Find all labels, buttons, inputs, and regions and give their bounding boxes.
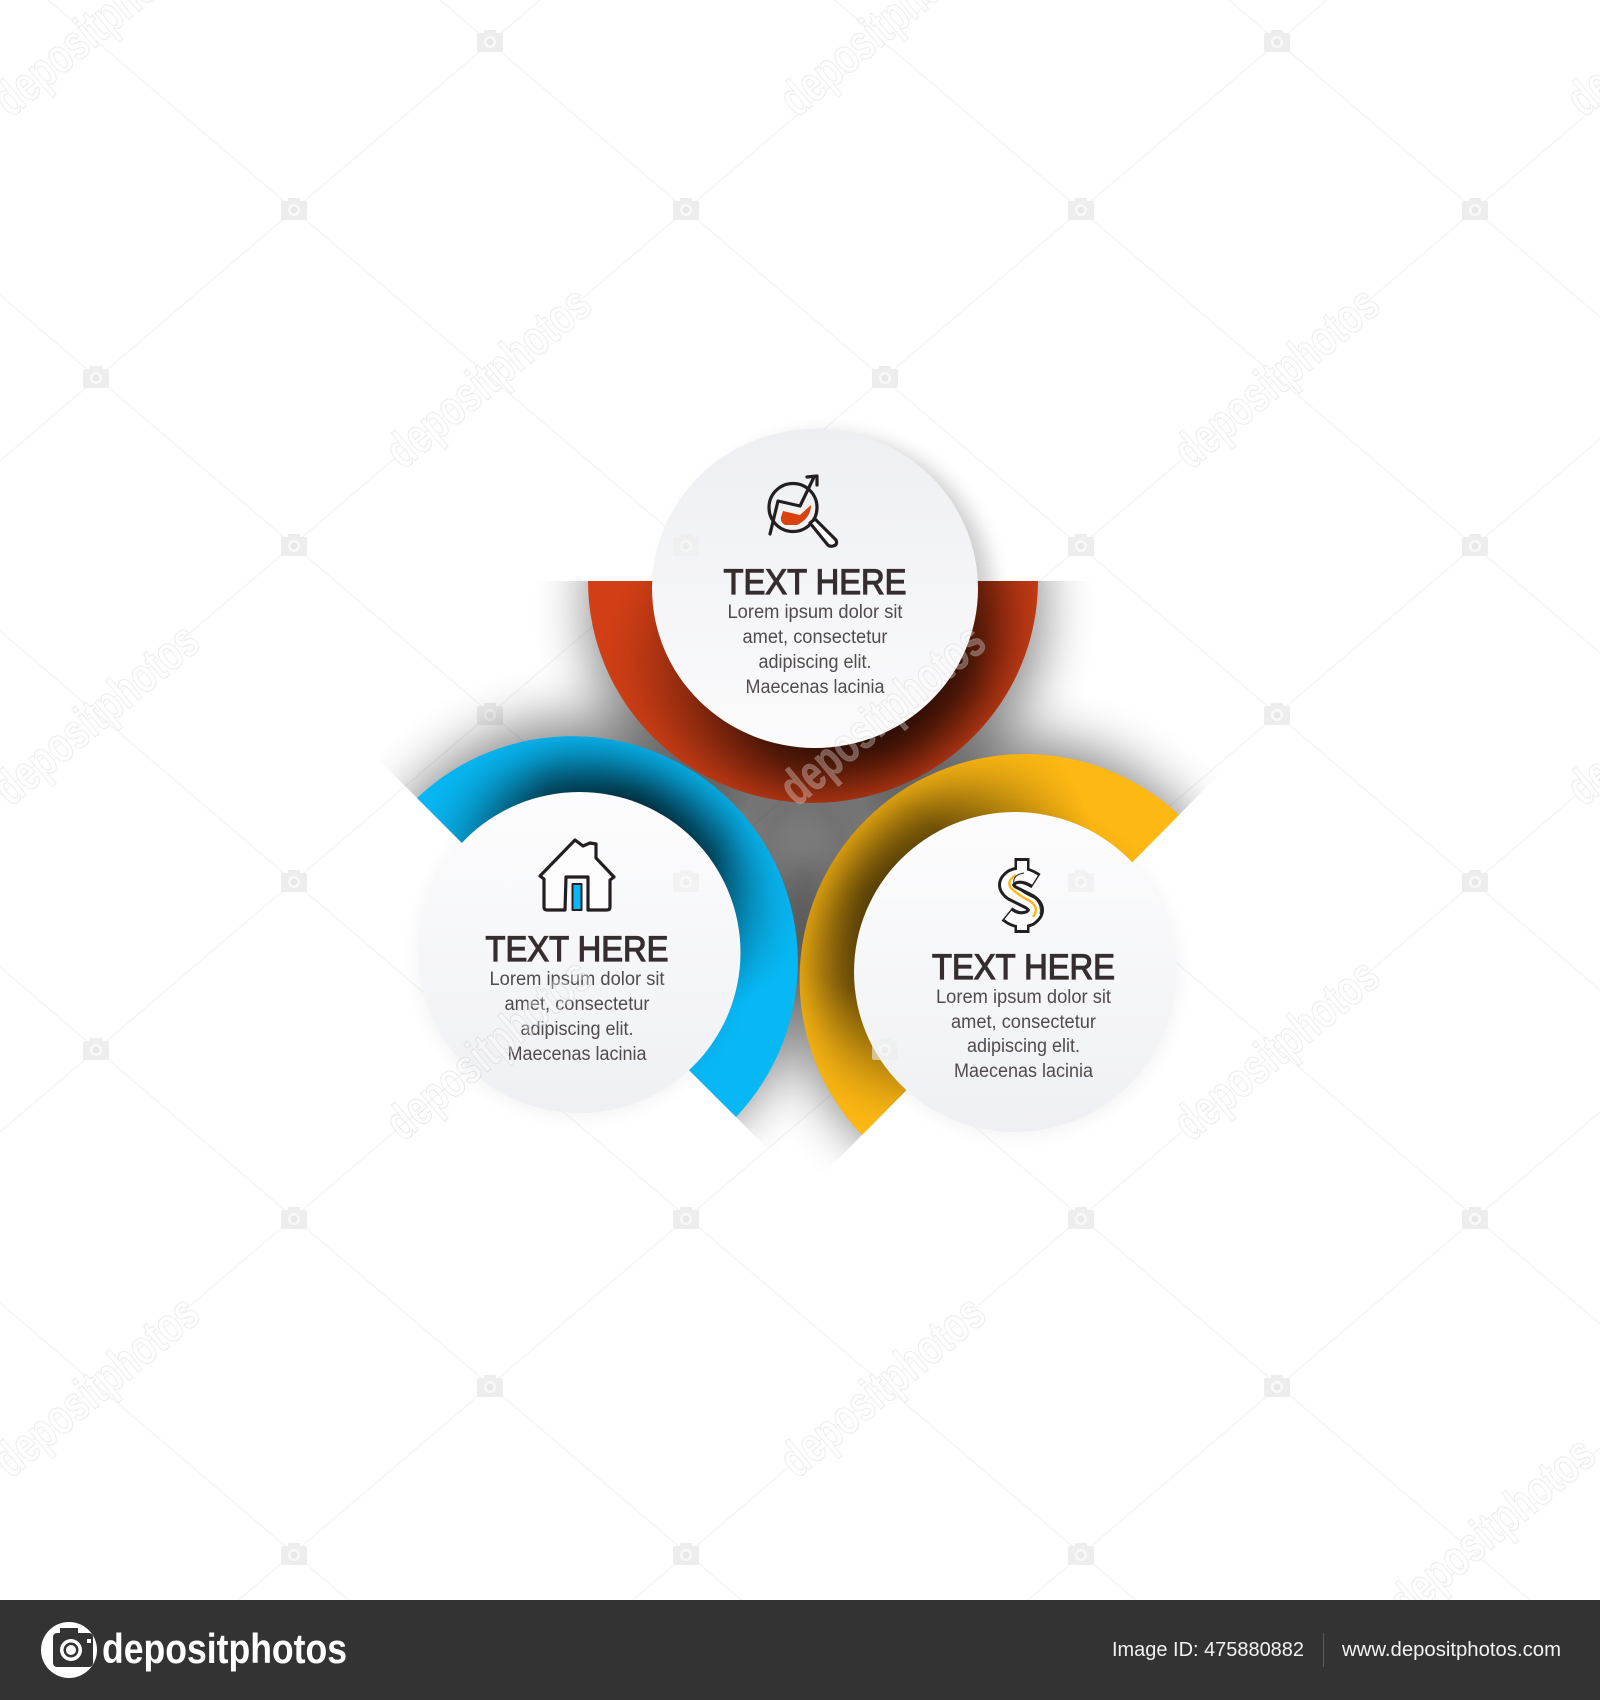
text block: left: adipiscing elit. xyxy=(520,1019,634,1040)
icon: house xyxy=(540,840,614,910)
watermark overlay on graphic: depositphotos xyxy=(768,612,996,816)
watermark overlay on graphic: depositphotos xyxy=(374,947,602,1151)
footer bar xyxy=(0,1600,1600,1700)
text block: top: Lorem ipsum dolor sit xyxy=(728,602,903,623)
icon: dollar xyxy=(1006,858,1040,933)
text block: right: amet, consectetur xyxy=(951,1012,1097,1033)
text block: top: amet, consectetur xyxy=(742,627,888,648)
text block: top: adipiscing elit. xyxy=(758,652,872,673)
text block: left: amet, consectetur xyxy=(504,994,650,1015)
icon: logo camera xyxy=(41,1622,97,1678)
panel: blue ring xyxy=(417,736,798,1117)
icon: magnifier with chart xyxy=(769,476,837,546)
website: www.depositphotos.com xyxy=(1341,1639,1561,1661)
image id: Image ID: 475880882 xyxy=(1112,1639,1304,1661)
text block: top: Maecenas lacinia xyxy=(746,677,885,698)
logo wordmark: depositphotos xyxy=(102,1625,347,1672)
text block: left xyxy=(490,969,665,1065)
panel: red ring xyxy=(588,581,1038,803)
panel: yellow ring xyxy=(800,754,1179,1135)
panel: right circle xyxy=(854,812,1178,1135)
panel: top circle xyxy=(652,429,992,756)
watermark overlay on graphic xyxy=(374,534,1094,1151)
watermark pattern: depositphotos xyxy=(1162,275,1390,479)
cast shadows of the half discs xyxy=(390,581,1206,1160)
panel: left circle xyxy=(417,792,741,1116)
text block: right: Lorem ipsum dolor sit xyxy=(936,987,1112,1008)
text block: left: Maecenas lacinia xyxy=(508,1044,647,1065)
text block: right: Maecenas lacinia xyxy=(954,1061,1093,1082)
watermark pattern: depositphotos xyxy=(374,275,602,479)
watermark pattern: depositphotos xyxy=(768,1284,996,1488)
heading: right: TEXT HERE xyxy=(932,948,1115,987)
text block: right xyxy=(936,987,1112,1082)
text block: top xyxy=(728,602,903,698)
text block: right: adipiscing elit. xyxy=(967,1036,1080,1057)
watermark pattern: depositphotos xyxy=(1162,947,1390,1151)
text block: left: Lorem ipsum dolor sit xyxy=(490,969,665,990)
heading: top: TEXT HERE xyxy=(724,563,906,602)
heading: left: TEXT HERE xyxy=(486,930,668,969)
